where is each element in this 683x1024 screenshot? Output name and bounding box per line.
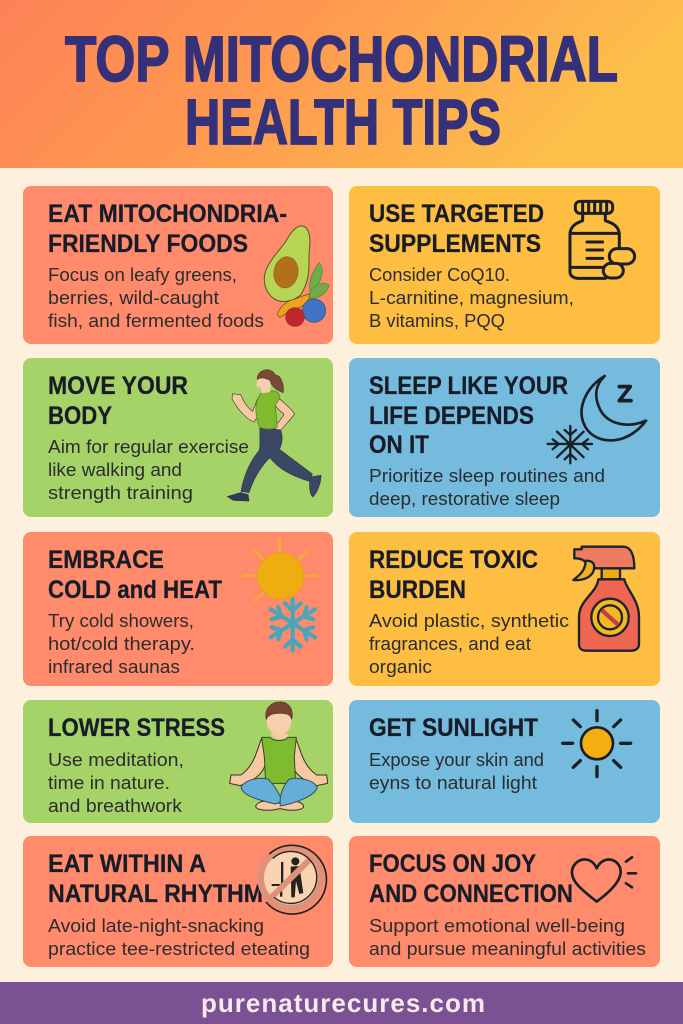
icon: spray bottle [573,547,639,651]
text block [369,749,544,793]
heading [369,850,573,908]
panel: lower stress [23,700,333,823]
text block: L-carnitine, magnesium, [369,287,574,308]
text block [48,610,195,677]
heading: SUPPLEMENTS [369,230,541,258]
text block: Aim for regular exercise [48,436,249,457]
text block: strength training [48,482,193,503]
text block: deep, restorative sleep [369,488,560,509]
icon: sun [563,711,631,777]
heading [48,546,222,604]
icon: runner [227,370,321,501]
heading [48,372,188,430]
panel: eat mitochondria-friendly foods [23,186,333,344]
panel: embrace cold and heat [23,532,333,686]
text block: practice tee-restricted eteating [48,938,310,959]
icon: supplement bottle [570,201,635,278]
text block: hot/cold therapy. [48,633,195,654]
panel: eat within a natural rhythm [23,836,333,967]
title: HEALTH TIPS [185,86,501,158]
text block [48,915,310,959]
heading: FOCUS ON JOY [369,850,536,878]
heading: EAT MITOCHONDRIA- [48,200,287,228]
text block: infrared saunas [48,656,180,677]
text block [369,465,605,509]
icon: avocado and berries [264,226,329,326]
heading: SLEEP LIKE YOUR [369,372,568,400]
website address: purenaturecures.com [201,988,485,1018]
text block: Use meditation, [48,749,184,770]
heading [369,546,538,604]
panel: move your body [23,358,333,517]
icon: sun and snowflake [243,538,317,651]
heading: COLD and HEAT [48,576,222,604]
text block [48,436,249,503]
panel: focus on joy and connection [349,836,660,967]
text block: and breathwork [48,795,183,816]
text block: B vitamins, PQQ [369,310,505,331]
heading: NATURAL RHYTHM [48,880,263,908]
heading [369,372,568,459]
text block [48,264,264,331]
footer bar [0,982,683,1024]
heading: EMBRACE [48,546,164,574]
heading: EAT WITHIN A [48,850,206,878]
title [65,23,618,158]
heading: USE TARGETED [369,200,544,228]
panel: use targeted supplements [349,186,660,344]
text block: Prioritize sleep routines and [369,465,605,486]
heading [369,200,544,258]
text block: Consider CoQ10. [369,264,510,285]
text block: Support emotional well-being [369,915,625,936]
icon: heart with rays [572,857,636,902]
text block: Avoid late-night-snacking [48,915,264,936]
text block [48,749,184,816]
icon: moon and snowflake [548,376,646,463]
heading: AND CONNECTION [369,880,573,908]
text block: eyns to natural light [369,772,537,793]
icon: meditating person [230,702,328,810]
heading: MOVE YOUR [48,372,188,400]
text block: Expose your skin and [369,749,544,770]
text block: time in nature. [48,772,170,793]
heading: LIFE DEPENDS [369,402,534,430]
text block: organic [369,656,432,677]
heading: BODY [48,402,112,430]
text block [369,264,574,331]
text block [369,610,569,677]
heading: FRIENDLY FOODS [48,230,248,258]
panel: sleep like your life depends on it [349,358,660,517]
text block: Avoid plastic, synthetic [369,610,569,631]
heading: ON IT [369,431,429,459]
heading: GET SUNLIGHT [369,714,538,742]
heading: BURDEN [369,576,466,604]
text block: berries, wild-caught [48,287,219,308]
icon: no late eating sign [261,845,326,914]
panel: get sunlight [349,700,660,823]
text block: Try cold showers, [48,610,194,631]
heading [48,850,263,908]
heading: LOWER STRESS [48,714,225,742]
heading [48,200,287,258]
text block: like walking and [48,459,182,480]
text block: fish, and fermented foods [48,310,264,331]
panel: reduce toxic burden [349,532,660,686]
header banner [0,0,683,168]
text block [369,915,646,959]
text block: fragrances, and eat [369,633,531,654]
heading: REDUCE TOXIC [369,546,538,574]
text block: Focus on leafy greens, [48,264,237,285]
text block: and pursue meaningful activities [369,938,646,959]
